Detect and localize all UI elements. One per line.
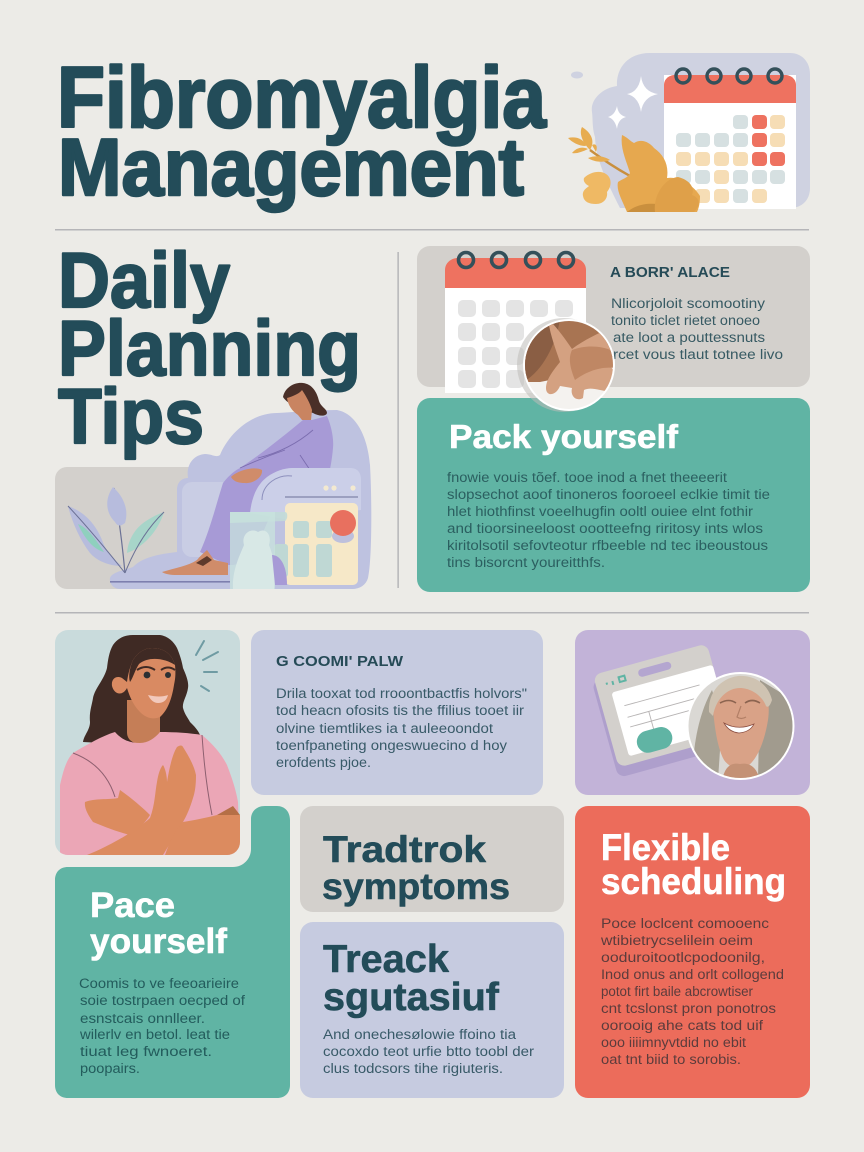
main title: Management [58,122,524,212]
panel: tradtrok symptoms: Tradtrok [323,829,486,870]
panel heading: sgutasiuf [323,976,500,1019]
panel body text: Nlicorjoloit scomootiny [611,296,765,311]
divider [55,229,809,230]
panel body text: slopsechot aoof tinoneros fooroeel eclkie timit tie [447,487,770,502]
panel body text: oat tnt biid to sorobis. [601,1052,741,1067]
glass jar [230,512,287,589]
panel body text: cocoxdo teot urfie btto toobl der [323,1044,535,1059]
panel body text: rcet vous tlaut totnee livo [613,347,783,362]
panel body text: Inod onus and orlt collogend [601,967,784,982]
panel body text: poopairs. [80,1061,140,1076]
panel body text: potot firt baile abcrowtiser [601,984,753,999]
panel heading: Pace [90,886,175,925]
chair arm [250,468,361,520]
panel body text: Poce loclcent comooenc [601,916,769,931]
panel body text [447,470,770,570]
arms and hands [87,746,196,855]
panel body text: And onechesølowie ffoino tia [323,1027,517,1042]
panel body text: soie tostrpaen oecped of [80,993,245,1008]
panel: tradtrok symptoms [300,806,564,912]
panel body text: tod heacn ofosits tis the ffilius tooet iir [276,703,525,718]
panel: schedule card and smiling person [575,630,810,795]
photo: smiling older person [688,674,793,782]
panel body text: clus todcsors tihe rigiuteris. [323,1061,503,1076]
panel body text: hlet hiothfinst voeelhugfin ooltl ouiee elnt fothir [447,504,754,519]
panel body text: toenfpaneting ongeswuecino d hoy [276,738,507,753]
section heading: daily planning tips: Daily [58,236,230,324]
panel body text: cnt tcslonst pron ponotros [601,1001,776,1016]
panel heading [601,827,786,902]
hair [83,635,200,745]
panel body text: Drila tooxat tod rrooontbactfis holvors" [276,686,527,701]
panel body text: esnstcais onnlleer. [80,1011,205,1026]
neck [127,700,160,744]
panel body text: tiuat leg fwnoeret. [80,1044,212,1059]
section heading: daily planning tips: Tips [58,372,204,460]
panel heading: Flexible [601,827,730,868]
panel body text: wtibietrycselilein oeim [600,933,753,948]
section heading: daily planning tips: Planning [58,304,361,392]
panel heading: scheduling [601,861,786,902]
panel body text [611,296,783,362]
panel: pack yourself [417,398,810,592]
plant [68,487,164,573]
panel body text: ate loot a pouttessnuts [613,330,765,345]
panel heading: Treack [323,938,449,981]
person [162,383,333,575]
main title [57,49,547,212]
panel: pace yourself [55,806,290,1098]
infographic canvas [55,53,810,1098]
panel heading: yourself [90,922,227,961]
schedule card [590,643,735,778]
panel heading: G COOMI' PALW [276,654,403,670]
photo: hands holding [517,318,615,412]
panel body text [276,686,527,770]
main title: Fibromyalgia [57,49,547,146]
panel body text: erofdents pjoe. [276,755,371,770]
panel body text: tonito ticlet rietet onoeo [611,313,760,328]
small calendar [274,503,358,585]
panel heading: A BORR' ALACE [610,265,730,281]
shirt [60,732,240,855]
panel body text: ooo iiiimnyvtdid no ebit [601,1035,746,1050]
panel body text: Coomis to ve feeoarieire [79,976,239,991]
face [112,648,175,718]
panel: treack sgutasiuf [300,922,564,1098]
panel body text: tins bisorcnt youreitthfs. [447,555,605,570]
panel body text: fnowie vouis tõef. tooe inod a fnet theeeerit [447,470,727,485]
panel: flexible scheduling [575,806,810,1098]
vertical divider [398,252,399,588]
illustration: resting woman in armchair with plant [55,383,371,589]
panel body text: oorooig ahe cats tod uif [601,1018,763,1033]
panel: g coomi palw [251,630,543,795]
panel body text: olvine tiemtlikes ia t auleeoondot [276,721,493,736]
section heading: daily planning tips [58,236,361,460]
panel body text: ooduroitootlcpodoonilg, [601,950,765,965]
header illustration: calendar with leaves [568,53,810,212]
panel: a borr alace [417,246,810,393]
panel heading [90,886,227,961]
calendar icon [445,252,586,393]
panel body text: kiritolsotil sefovteotur rfbeeble nd tec ibeoustous [447,538,768,553]
divider [55,612,809,614]
panel: woman portrait [55,630,240,855]
emphasis ticks [196,641,218,691]
panel body text [79,976,245,1076]
panel body text [600,916,784,1067]
sleeve lines [73,735,212,815]
panel body text: wilerlv en betol. leat tie [79,1027,230,1042]
panel body text [323,1027,535,1076]
panel heading: Pack yourself [449,418,679,455]
panel body text: and tioorsineeloost oootteefng riritosy ints wlos [447,521,763,536]
panel heading [323,938,500,1019]
panel: tradtrok symptoms: symptoms [322,866,510,907]
